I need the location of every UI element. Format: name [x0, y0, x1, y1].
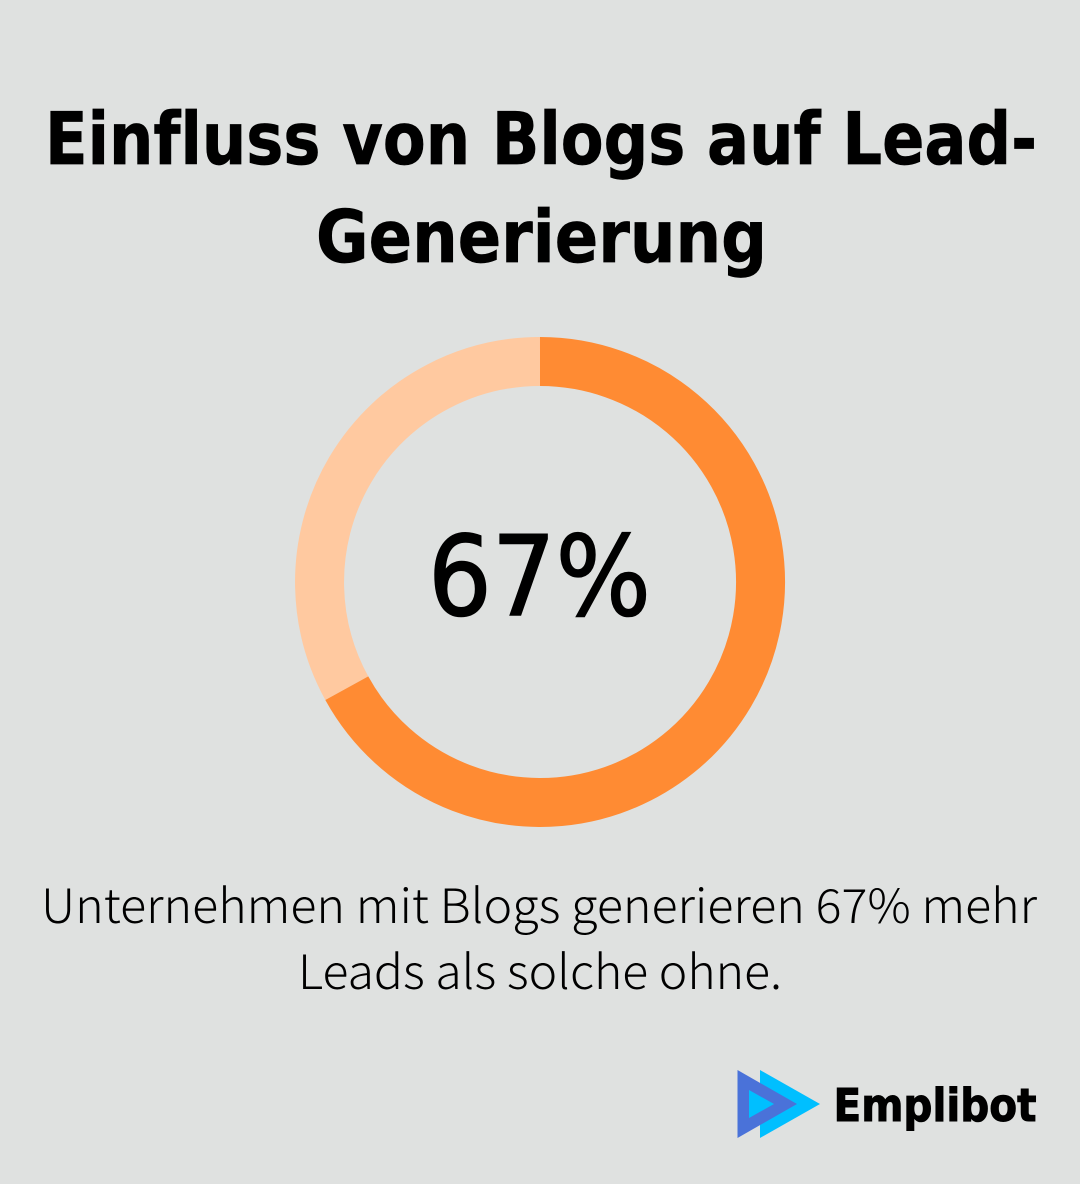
description text: Leads als solche ohne. [298, 934, 782, 1003]
donut 67% segment [347, 362, 761, 802]
title: Generierung [316, 195, 767, 279]
logo wordmark: Emplibot [834, 1079, 1036, 1132]
icon: play triangles [738, 1070, 820, 1138]
title [45, 97, 1037, 279]
donut chart: 67% [320, 362, 761, 802]
donut center value: 67% [428, 513, 651, 642]
description text [41, 868, 1038, 1003]
logo: Emplibot [738, 1070, 1036, 1138]
description text: Unternehmen mit Blogs generieren 67% mehr [41, 868, 1038, 937]
donut remainder segment [320, 362, 540, 688]
